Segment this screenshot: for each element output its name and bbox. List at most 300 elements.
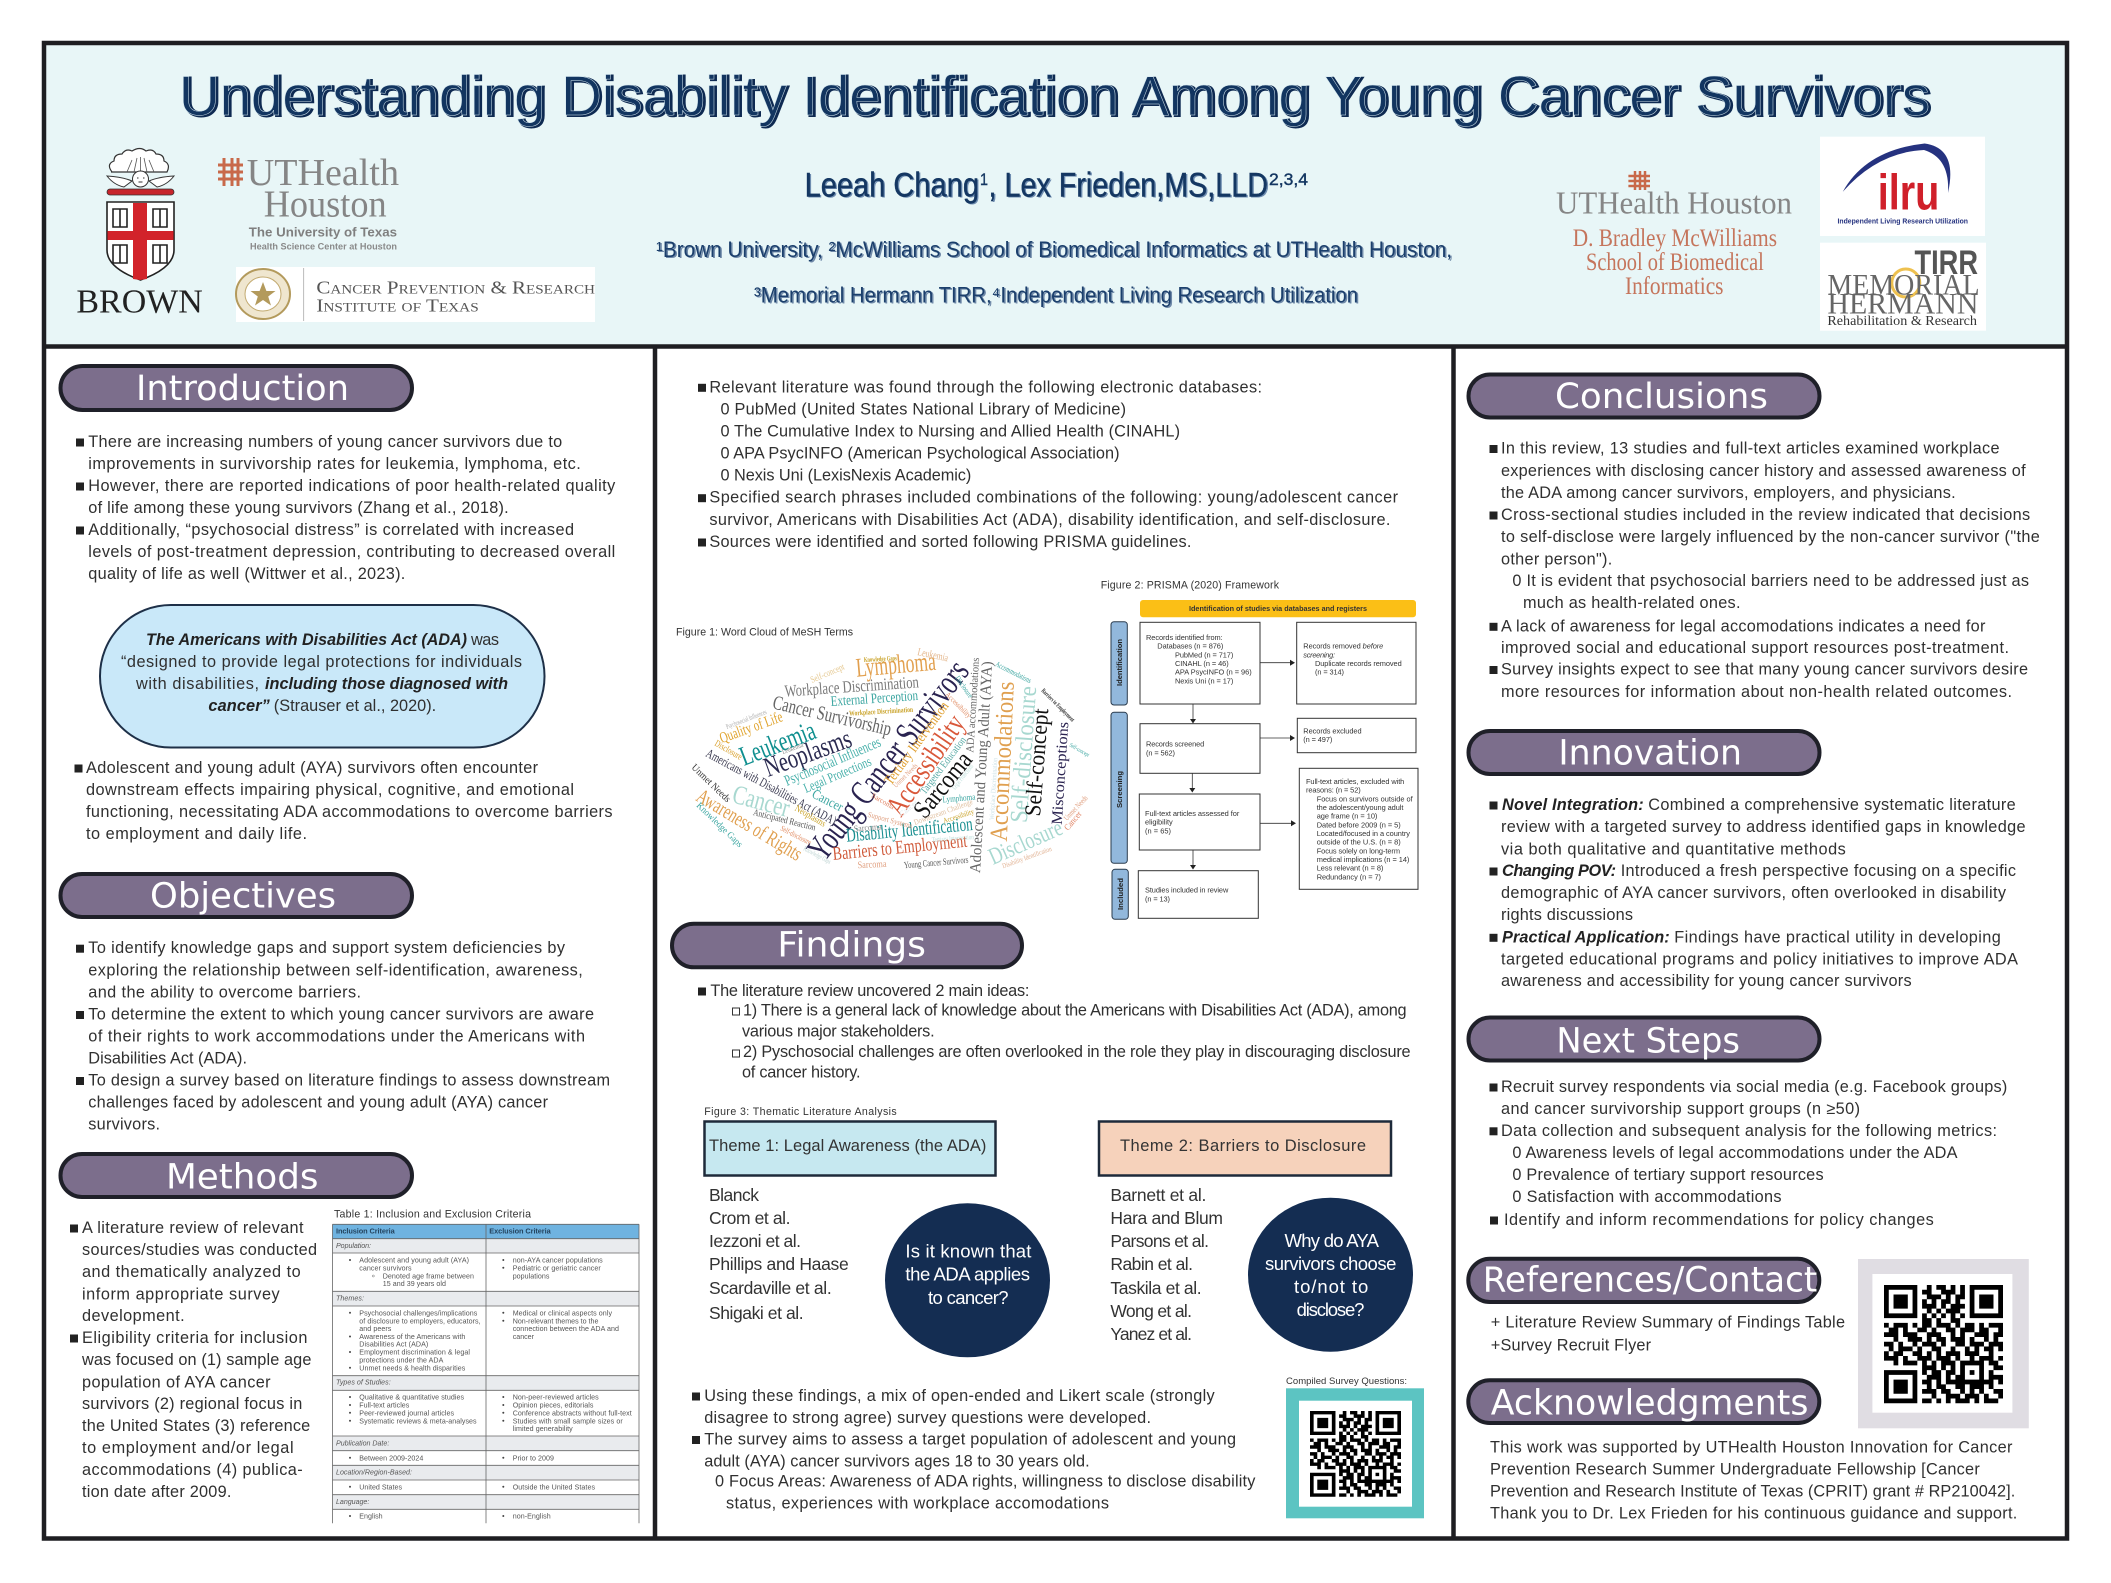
PRISMA boxes: (n = 562) xyxy=(1146,748,1175,757)
question circle 1: Is it known that xyxy=(905,1241,1031,1262)
question circle 2 xyxy=(1248,1198,1413,1352)
table 1: inclusion and exclusion criteria: Studies with small sample sizes or xyxy=(513,1417,623,1425)
figure 1: word cloud of MeSH terms xyxy=(676,627,1091,874)
figure 1: word cloud of MeSH terms: Disclosure xyxy=(953,674,975,700)
theme 1 study list: Phillips and Haase xyxy=(709,1254,849,1274)
PRISMA boxes: the adolescent/young adult xyxy=(1317,803,1403,812)
text: objectives bullets: challenges faced by adolescent and young adult (AYA) cancer xyxy=(88,1094,549,1112)
question circle 1: the ADA applies xyxy=(905,1264,1030,1285)
figure 1: word cloud of MeSH terms: Cancer Survivorship xyxy=(771,692,893,740)
PRISMA boxes: CINAHL (n = 46) xyxy=(1175,659,1229,668)
text: acknowledgments: This work was supported by UTHealth Houston Innovation for Cancer xyxy=(1490,1439,2013,1457)
heading: methods: Methods xyxy=(166,1158,318,1198)
figure 1: word cloud of MeSH terms: Misconceptions xyxy=(1049,721,1072,825)
QR code: references xyxy=(1858,1259,2029,1428)
panel: references and contact xyxy=(1468,1259,2029,1428)
text: introduction bullets: improvements in survivorship rates for leukemia, lymphoma, etc. xyxy=(88,455,581,473)
table 1: inclusion and exclusion criteria: Opinion pieces, editorials xyxy=(513,1402,594,1410)
panel: literature search text: Sources were identified and sorted following PRISMA guidelines. xyxy=(709,533,1191,551)
text: survey development: status, experiences with workplace accomodations xyxy=(726,1495,1109,1513)
PRISMA boxes: (n = 13) xyxy=(1145,894,1170,903)
heading: acknowledgments: Acknowledgments xyxy=(1491,1383,1808,1423)
figure 1: word cloud of MeSH terms: Knowledge Gaps xyxy=(694,801,744,850)
table 1: inclusion and exclusion criteria: Employment discrimination & legal xyxy=(359,1349,470,1357)
PRISMA boxes: Records removed before xyxy=(1303,642,1383,651)
figure 1: word cloud of MeSH terms: Workplace Discrimination xyxy=(784,672,920,701)
table 1: inclusion and exclusion criteria: Between 2009-2024 xyxy=(359,1454,423,1462)
text: introduction bullets: levels of post-treatment depression, contributing to decreased overall xyxy=(88,543,615,561)
text: methods bullets: inform appropriate survey xyxy=(82,1285,281,1303)
figure 1: word cloud of MeSH terms: Young Cancer Survivors xyxy=(799,652,977,868)
heading: objectives xyxy=(60,874,412,917)
text: objectives bullets: To design a survey based on literature findings to assess downstream xyxy=(88,1072,610,1090)
table 1: inclusion and exclusion criteria: connection between the ADA and xyxy=(513,1325,619,1333)
table 1: inclusion and exclusion criteria: Prior to 2009 xyxy=(513,1454,554,1462)
table 1: inclusion and exclusion criteria: of disclosure to employers, educators, xyxy=(359,1317,481,1325)
text: survey development xyxy=(692,1387,1256,1513)
logo: UTHealth Houston with University of Texas: Health Science Center at Houston xyxy=(250,241,397,252)
PRISMA arrows xyxy=(1189,660,1296,870)
figure 1: word cloud of MeSH terms: Psychosocial Influences xyxy=(725,708,768,731)
figure 1: word cloud of MeSH terms: Sarcoma xyxy=(907,745,978,824)
text: conclusions bullets: more resources for information about non-health related outcomes. xyxy=(1501,683,2012,701)
figure 1: word cloud of MeSH terms: Self-concept xyxy=(809,661,847,686)
figure 1: word cloud of MeSH terms: Lymphoma xyxy=(855,646,937,683)
heading: findings xyxy=(672,924,1022,967)
authors: 2,3,4 xyxy=(1269,170,1308,189)
theme 2 study list: Barnett et al. xyxy=(1110,1185,1206,1205)
theme 2 box: Theme 2: Barriers to Disclosure xyxy=(1120,1137,1366,1155)
affiliations: ³Memorial Hermann TIRR,⁴Independent Living Research Utilization xyxy=(754,283,1358,308)
theme 2 study list: Rabin et al. xyxy=(1110,1254,1193,1274)
figure 1: word cloud of MeSH terms: Psychosocial Influences xyxy=(782,734,883,790)
panel: literature search text: Specified search phrases included combinations of the following: young/adolescent cancer xyxy=(709,489,1399,507)
figure 1: word cloud of MeSH terms: Workplace Discrimination xyxy=(988,757,999,820)
theme 1 study list: Shigaki et al. xyxy=(709,1303,804,1323)
theme 2 study list: Taskila et al. xyxy=(1110,1278,1202,1298)
table 1: inclusion and exclusion criteria xyxy=(332,1209,639,1523)
logo: TIRR Memorial Hermann: HERMANN xyxy=(1827,287,1978,320)
panel: conclusions xyxy=(1468,374,2040,701)
figure 1: word cloud of MeSH terms: Disclosure xyxy=(985,815,1067,870)
figure 1: word cloud of MeSH terms: Sarcoma xyxy=(857,859,887,871)
theme 2 study list: Yanez et al. xyxy=(1110,1324,1192,1344)
PRISMA header banner: Identification of studies via databases and registers xyxy=(1189,604,1367,613)
table 1: inclusion and exclusion criteria: populations xyxy=(513,1272,550,1280)
panel: innovation xyxy=(1468,731,2026,990)
panel: methods xyxy=(60,1154,639,1523)
text: innovation bullets: Novel Integration: xyxy=(1502,796,1644,814)
text: AYA survivors bullet xyxy=(74,759,612,843)
figure 1: word cloud of MeSH terms: Disclosure xyxy=(712,739,743,763)
text: findings main ideas: 2) Pyschosocial challenges are often overlooked in the role they play in discouraging disclosure xyxy=(743,1043,1411,1061)
authors: , Lex Frieden,MS,LLD xyxy=(988,167,1268,205)
PRISMA boxes: Less relevant (n = 8) xyxy=(1317,864,1383,873)
figure 1: word cloud of MeSH terms: Unmet Needs xyxy=(689,762,733,805)
text: acknowledgments: Prevention Research Summer Undergraduate Fellowship [Cancer xyxy=(1490,1461,1980,1479)
PRISMA boxes: PubMed (n = 717) xyxy=(1175,650,1233,659)
question circle 2: Why do AYA xyxy=(1284,1230,1380,1251)
logo: UTHealth Houston with University of Texas: Houston xyxy=(264,184,387,226)
PRISMA boxes: Duplicate records removed xyxy=(1315,659,1402,668)
text: methods bullets: tion date after 2009. xyxy=(82,1483,231,1501)
table 1: inclusion and exclusion criteria: Location/Region-Based: xyxy=(336,1469,412,1477)
theme 2 study list xyxy=(1110,1185,1223,1344)
authors: Leeah Chang xyxy=(806,168,980,206)
PRISMA boxes: Records identified from: xyxy=(1146,633,1223,642)
text: innovation bullets: Practical Application: xyxy=(1502,928,1670,946)
panel: header band xyxy=(44,43,2067,346)
figure 1: word cloud of MeSH terms: Cancer xyxy=(898,798,920,819)
question circle 1: to cancer? xyxy=(928,1287,1009,1308)
text: survey development: adult (AYA) cancer survivors ages 18 to 30 years old. xyxy=(704,1452,1090,1470)
figure 1: word cloud of MeSH terms: Neoplasms xyxy=(760,723,856,784)
PRISMA boxes: outside of the U.S. (n = 8) xyxy=(1317,838,1401,847)
PRISMA boxes: reasons: (n = 52) xyxy=(1306,786,1361,795)
logo: TIRR Memorial Hermann: MEMORIAL xyxy=(1827,268,1980,301)
heading: introduction xyxy=(60,366,412,410)
PRISMA boxes: Nexis Uni (n = 17) xyxy=(1175,676,1233,685)
text: next steps bullets xyxy=(1490,1078,2007,1229)
text: conclusions bullets: other person"). xyxy=(1501,550,1612,568)
table 1: inclusion and exclusion criteria: Adolescent and young adult (AYA) xyxy=(359,1257,469,1265)
logo: UTHealth McWilliams School of Biomedical Informatics: School of Biomedical xyxy=(1586,249,1764,276)
text: innovation bullets: awareness and accessibility for young cancer survivors xyxy=(1501,972,1912,990)
callout: ADA definition: including those diagnosed with xyxy=(265,675,508,693)
text: innovation bullets: Introduced a fresh perspective focusing on a specific xyxy=(1621,862,2016,880)
text: AYA survivors bullet: to employment and daily life. xyxy=(86,825,307,843)
text: objectives bullets: survivors. xyxy=(88,1116,160,1134)
QR code: compiled survey questions: Compiled Survey Questions: xyxy=(1286,1376,1407,1387)
text: next steps bullets: Identify and inform recommendations for policy changes xyxy=(1504,1211,1934,1229)
table 1: inclusion and exclusion criteria: Exclusion Criteria xyxy=(489,1226,552,1235)
heading: objectives: Objectives xyxy=(150,877,336,917)
PRISMA boxes: (n = 314) xyxy=(1315,668,1344,677)
text: objectives bullets: Disabilities Act (ADA). xyxy=(88,1049,247,1067)
figure 1: word cloud of MeSH terms: Leukemia xyxy=(781,741,805,756)
theme 1 box xyxy=(704,1122,996,1176)
text: findings main ideas: 1) There is a general lack of knowledge about the Americans with Disabilities Act (ADA), among xyxy=(743,1001,1407,1019)
theme 1 box: Theme 1: Legal Awareness (the ADA) xyxy=(709,1137,986,1155)
PRISMA boxes: Dated before 2009 (n = 5) xyxy=(1317,820,1401,829)
theme 2 study list: Wong et al. xyxy=(1110,1301,1192,1321)
theme 2 study list: Parsons et al. xyxy=(1110,1231,1209,1251)
title: Understanding Disability Identification Among Young Cancer Survivors xyxy=(181,65,1932,128)
PRISMA phase labels: Screening xyxy=(1115,770,1124,808)
theme 1 study list: Crom et al. xyxy=(709,1208,790,1228)
theme 1 study list: Blanck xyxy=(709,1185,759,1205)
figure 1: word cloud of MeSH terms: Leukemia xyxy=(735,715,821,773)
table 1: inclusion and exclusion criteria: non-English xyxy=(513,1513,551,1521)
table 1: inclusion and exclusion criteria: Types of Studies: xyxy=(336,1379,391,1387)
text: next steps bullets: Recruit survey respondents via social media (e.g. Facebook groups) xyxy=(1501,1078,2007,1096)
text: survey development: The survey aims to assess a target population of adolescent and young xyxy=(704,1430,1236,1448)
table 1: inclusion and exclusion criteria: Systematic reviews & meta-analyses xyxy=(359,1417,477,1425)
figure 1: word cloud of MeSH terms: Self-disclosure xyxy=(779,824,813,847)
text: methods bullets: survivors (2) regional focus in xyxy=(82,1395,302,1413)
logo: Cancer Prevention and Research Institute of Texas: Cancer Prevention & Research xyxy=(316,277,595,297)
table 1: inclusion and exclusion criteria: Table 1: Inclusion and Exclusion Criteria xyxy=(334,1209,531,1221)
affiliations: ¹Brown University, ²McWilliams School of Biomedical Informatics at UTHealth Houston, xyxy=(656,237,1452,262)
logo: TIRR Memorial Hermann: TIRR xyxy=(1914,244,1978,282)
text: methods bullets: population of AYA cancer xyxy=(82,1373,271,1391)
PRISMA boxes: Focus on survivors outside of xyxy=(1317,794,1414,803)
callout: ADA definition: The Americans with Disabilities Act (ADA) xyxy=(146,631,467,649)
figure 1: word cloud of MeSH terms: Cancer xyxy=(729,779,793,823)
figure 2: PRISMA flow diagram xyxy=(1101,579,1418,919)
figure 1: word cloud of MeSH terms: Figure 1: Word Cloud of MeSH Terms xyxy=(676,627,853,639)
figure 1: word cloud of MeSH terms: Knowledge Gaps xyxy=(802,845,832,866)
text: innovation bullets: Combined a comprehensive systematic literature xyxy=(1648,796,2016,814)
table 1: inclusion and exclusion criteria: Awareness of the Americans with xyxy=(359,1333,465,1341)
table 1: inclusion and exclusion criteria: Medical or clinical aspects only xyxy=(513,1309,612,1317)
figure 1: word cloud of MeSH terms: Quality of Life xyxy=(717,708,785,747)
title: Understanding Disability Identification Among Young Cancer Survivors xyxy=(179,64,1930,127)
table 1: inclusion and exclusion criteria: cancer survivors xyxy=(359,1264,412,1272)
figure 1: word cloud of MeSH terms: External Perception xyxy=(830,688,919,710)
figure 1: word cloud of MeSH terms: Legal Protections xyxy=(950,763,975,791)
theme 1 study list: Iezzoni et al. xyxy=(709,1231,801,1251)
table 1: inclusion and exclusion criteria: Publication Date: xyxy=(336,1439,389,1447)
panel: findings xyxy=(672,924,1424,1518)
affiliations: ¹Brown University, ²McWilliams School of Biomedical Informatics at UTHealth Houston, xyxy=(658,238,1454,263)
figure 1: word cloud of MeSH terms: Tertiary Intervention xyxy=(881,698,953,788)
text: acknowledgments: Prevention and Research Institute of Texas (CPRIT) grant # RP210042]. xyxy=(1490,1483,2015,1501)
text: introduction bullets: of life among these young survivors (Zhang et al., 2018). xyxy=(88,499,509,517)
table 1: inclusion and exclusion criteria: 15 and 39 years old xyxy=(383,1280,446,1288)
logo: Cancer Prevention and Research Institute of Texas xyxy=(236,267,595,322)
table 1: inclusion and exclusion criteria: Non-relevant themes to the xyxy=(513,1317,598,1325)
logo: UTHealth McWilliams School of Biomedical Informatics: Informatics xyxy=(1625,273,1724,300)
callout: ADA definition: “designed to provide legal protections for individuals xyxy=(121,653,522,671)
figure 1: word cloud of MeSH terms: Awareness of Rights xyxy=(692,784,807,866)
PRISMA boxes: eligibility xyxy=(1145,818,1173,827)
PRISMA boxes: Records excluded xyxy=(1303,726,1362,735)
text: methods bullets: A literature review of relevant xyxy=(82,1219,304,1237)
figure 1: word cloud of MeSH terms: Sarcoma xyxy=(853,821,882,834)
panel: introduction xyxy=(60,366,616,843)
figure 3: thematic literature analysis xyxy=(704,1106,1413,1357)
theme 2 box xyxy=(1099,1122,1391,1176)
table 1: inclusion and exclusion criteria: Peer-reviewed journal articles xyxy=(359,1409,454,1417)
figure 1: word cloud of MeSH terms: Self-disclosure xyxy=(1006,685,1042,824)
figure 1: word cloud of MeSH terms: Unmet Needs xyxy=(1062,794,1090,822)
figure 1: word cloud of MeSH terms: Accommodations xyxy=(994,659,1033,685)
PRISMA boxes: Redundancy (n = 7) xyxy=(1317,872,1381,881)
text: references list xyxy=(1491,1313,1845,1355)
PRISMA boxes: Full-text articles, excluded with xyxy=(1306,777,1404,786)
heading: innovation: Innovation xyxy=(1558,734,1742,774)
panel: literature search text: 0 The Cumulative Index to Nursing and Allied Health (CINAHL) xyxy=(720,422,1180,440)
text: methods bullets: to employment and/or legal xyxy=(82,1439,294,1457)
text: conclusions bullets: experiences with disclosing cancer history and assessed awareness of xyxy=(1501,462,2026,480)
PRISMA boxes: screening: xyxy=(1303,650,1335,659)
PRISMA boxes: Studies included in review xyxy=(1145,886,1229,895)
heading: findings: Findings xyxy=(777,926,926,966)
table 1: inclusion and exclusion criteria: Psychosocial challenges/implications xyxy=(359,1309,478,1317)
figure 1: word cloud of MeSH terms: Leukemia xyxy=(916,646,949,664)
text: conclusions bullets xyxy=(1490,440,2040,701)
figure 1: word cloud of MeSH terms: Accessibility xyxy=(880,708,972,822)
text: findings main ideas: The literature review uncovered 2 main ideas: xyxy=(710,982,1029,1000)
callout: ADA definition: (Strauser et al., 2020). xyxy=(274,697,436,715)
figure 1: word cloud of MeSH terms: Unmet Needs xyxy=(892,762,919,789)
heading: methods xyxy=(60,1154,412,1198)
panel: literature search text xyxy=(698,378,1399,551)
table 1: inclusion and exclusion criteria: Non-peer-reviewed articles xyxy=(513,1394,599,1402)
affiliations xyxy=(656,237,1454,308)
figure 1: word cloud of MeSH terms: Legal Protections xyxy=(802,755,874,797)
figure 1: word cloud of MeSH terms: Sarcoma xyxy=(870,791,897,812)
text: conclusions bullets: A lack of awareness for legal accomodations indicates a need for xyxy=(1501,617,1986,635)
text: introduction bullets xyxy=(76,433,616,583)
panel: next steps xyxy=(1468,1018,2007,1229)
text: innovation bullets xyxy=(1490,796,2026,990)
text: AYA survivors bullet: Adolescent and young adult (AYA) survivors often encounter xyxy=(86,759,539,777)
heading: conclusions xyxy=(1468,374,1820,418)
text: findings main ideas: of cancer history. xyxy=(742,1064,860,1082)
panel: literature search text: 0 PubMed (United States National Library of Medicine) xyxy=(720,400,1126,418)
text: conclusions bullets: to self-disclose were largely influenced by the non-cancer survivor ("the xyxy=(1501,528,2040,546)
figure 1: word cloud of MeSH terms: Americans with Disabilities Act (ADA) xyxy=(704,745,839,828)
text: methods bullets: accommodations (4) publica- xyxy=(82,1461,303,1479)
table 1: inclusion and exclusion criteria: Unmet needs & health disparities xyxy=(359,1364,466,1372)
panel: acknowledgments xyxy=(1468,1380,2017,1523)
figure 1: word cloud of MeSH terms: Young Cancer Survivors xyxy=(904,856,969,871)
figure 1: word cloud of MeSH terms: Support Systems xyxy=(867,810,914,831)
panel: literature search text: survivor, Americans with Disabilities Act (ADA), disability identification, and self-disclosure. xyxy=(709,511,1390,529)
text: survey development: Using these findings, a mix of open-ended and Likert scale (strongly xyxy=(704,1387,1216,1405)
text: innovation bullets: Findings have practical utility in developing xyxy=(1674,928,2001,946)
text: innovation bullets: rights discussions xyxy=(1501,906,1633,924)
question circle 2: survivors choose xyxy=(1265,1253,1396,1274)
text: next steps bullets: and cancer survivorship support groups (n ≥50) xyxy=(1501,1100,1860,1118)
text: references list: + Literature Review Summary of Findings Table xyxy=(1491,1313,1845,1331)
logo: UTHealth Houston with University of Texas: The University of Texas xyxy=(249,225,397,240)
heading: next steps: Next Steps xyxy=(1556,1021,1740,1061)
PRISMA boxes: Focus solely on long-term xyxy=(1317,846,1400,855)
table 1: inclusion and exclusion criteria: Outside the United States xyxy=(513,1483,595,1491)
figure 1: word cloud of MeSH terms: Neoplasms xyxy=(793,804,827,830)
figure 1: word cloud of MeSH terms: ADA accommodations xyxy=(964,657,982,753)
figure 1: word cloud of MeSH terms: Tertiary Intervention xyxy=(932,833,974,844)
logo: TIRR Memorial Hermann xyxy=(1820,243,1986,331)
table 1: inclusion and exclusion criteria: Disabilities Act (ADA) xyxy=(359,1341,428,1349)
affiliations: ³Memorial Hermann TIRR,⁴Independent Living Research Utilization xyxy=(756,284,1360,308)
callout: ADA definition xyxy=(100,605,544,748)
authors: 1 xyxy=(980,170,988,189)
text: AYA survivors bullet: downstream effects impairing physical, cognitive, and emotional xyxy=(86,781,574,799)
text: introduction bullets: However, there are reported indications of poor health-related quality xyxy=(88,477,616,495)
logo: UTHealth McWilliams School of Biomedical Informatics: D. Bradley McWilliams xyxy=(1573,225,1777,252)
text: conclusions bullets: Survey insights expect to see that many young cancer survivors desire xyxy=(1501,660,2028,678)
theme 1 study list xyxy=(709,1185,849,1323)
logo: Brown University xyxy=(76,148,203,321)
text: innovation bullets: targeted educational programs and policy initiatives to improve ADA xyxy=(1501,950,2018,968)
callout: ADA definition: cancer” xyxy=(208,697,271,715)
table 1: inclusion and exclusion criteria: Full-text articles xyxy=(359,1402,410,1410)
text: innovation bullets: demographic of AYA cancer survivors, often overlooked in disability xyxy=(1501,884,2007,902)
text: objectives bullets xyxy=(76,939,610,1134)
table 1: inclusion and exclusion criteria: and peers xyxy=(359,1325,392,1333)
figure 1: word cloud of MeSH terms: Lymphoma xyxy=(942,792,976,804)
theme 1 study list: Scardaville et al. xyxy=(709,1278,832,1298)
heading: conclusions: Conclusions xyxy=(1555,377,1768,417)
panel: literature search text: 0 APA PsycINFO (American Psychological Association) xyxy=(720,444,1120,462)
text: findings main ideas: various major stakeholders. xyxy=(742,1023,935,1041)
table 1: inclusion and exclusion criteria: Population: xyxy=(336,1242,371,1250)
text: objectives bullets: To determine the extent to which young cancer survivors are aware xyxy=(88,1006,594,1024)
callout: ADA definition: was xyxy=(470,631,499,649)
text: next steps bullets: 0 Satisfaction with accommodations xyxy=(1512,1188,1782,1206)
text: objectives bullets: and the ability to overcome barriers. xyxy=(88,984,361,1002)
table 1: inclusion and exclusion criteria: Language: xyxy=(336,1498,369,1506)
text: findings main ideas xyxy=(698,982,1411,1082)
question circle 2: to/not to xyxy=(1294,1276,1368,1297)
logo: TIRR Memorial Hermann: Rehabilitation & Research xyxy=(1827,314,1977,329)
figure 1: word cloud of MeSH terms: Anticipated Reaction xyxy=(752,808,817,833)
panel: literature search text: 0 Nexis Uni (LexisNexis Academic) xyxy=(720,467,971,485)
table 1: inclusion and exclusion criteria: non-AYA cancer populations xyxy=(513,1257,603,1265)
text: conclusions bullets: In this review, 13 studies and full-text articles examined workplace xyxy=(1501,440,2000,458)
logo: UTHealth Houston with University of Texas: UTHealth xyxy=(247,152,399,194)
figure 1: word cloud of MeSH terms: Self-concept xyxy=(1020,707,1053,817)
table 1: inclusion and exclusion criteria: United States xyxy=(359,1483,402,1491)
text: introduction bullets: quality of life as well (Wittwer et al., 2023). xyxy=(88,565,405,583)
logo: UTHealth McWilliams School of Biomedical Informatics: UTHealth Houston xyxy=(1556,184,1792,220)
figure 1: word cloud of MeSH terms: Targeted Education xyxy=(919,735,969,797)
figure 1: word cloud of MeSH terms: Workplace Discrimination xyxy=(849,705,914,718)
table 1: inclusion and exclusion criteria: Conference abstracts without full-text xyxy=(513,1409,632,1417)
PRISMA phase labels: Included xyxy=(1116,877,1125,910)
logo: Brown University: BROWN xyxy=(76,284,203,321)
PRISMA boxes: (n = 65) xyxy=(1145,826,1171,835)
panel: objectives xyxy=(60,874,610,1134)
text: references list: +Survey Recruit Flyer xyxy=(1491,1337,1652,1355)
text: acknowledgments: Thank you to Dr. Lex Frieden for his continuous guidance and support. xyxy=(1490,1505,2017,1523)
table 1: inclusion and exclusion criteria: protections under the ADA xyxy=(359,1356,444,1364)
figure 1: word cloud of MeSH terms: Adolescent and Young Adult (AYA) xyxy=(967,661,996,874)
text: AYA survivors bullet: functioning, necessitating ADA accommodations to overcome barriers xyxy=(86,803,612,821)
heading: introduction: Introduction xyxy=(136,369,349,409)
logo: UTHealth Houston with University of Texas xyxy=(218,152,399,252)
table 1: inclusion and exclusion criteria: Qualitative & quantitative studies xyxy=(359,1394,464,1402)
text: next steps bullets: Data collection and subsequent analysis for the following metrics: xyxy=(1501,1122,1997,1140)
table 1: inclusion and exclusion criteria: Inclusion Criteria xyxy=(336,1226,396,1235)
logo: Cancer Prevention and Research Institute of Texas: Institute of Texas xyxy=(316,296,479,316)
heading: innovation xyxy=(1468,731,1820,774)
text: acknowledgments xyxy=(1490,1439,2017,1523)
text: introduction bullets: There are increasing numbers of young cancer survivors due to xyxy=(88,433,562,451)
table 1: inclusion and exclusion criteria: cancer xyxy=(513,1333,535,1341)
figure 1: word cloud of MeSH terms: Downstream Challenge xyxy=(913,797,974,827)
question circle 1 xyxy=(885,1203,1050,1357)
logo: ILRU: ilru xyxy=(1878,164,1939,220)
question circle 2: disclose? xyxy=(1297,1299,1364,1320)
figure 1: word cloud of MeSH terms: Disability Identification xyxy=(1001,845,1053,870)
text: objectives bullets: exploring the relationship between self-identification, awareness, xyxy=(88,961,583,979)
PRISMA boxes: Located/focused in a country xyxy=(1317,829,1410,838)
text: methods bullets: Eligibility criteria for inclusion xyxy=(82,1329,307,1347)
logo: UTHealth McWilliams School of Biomedical Informatics xyxy=(1556,171,1792,300)
figure 1: word cloud of MeSH terms: Cancer xyxy=(810,786,846,815)
text: conclusions bullets: Cross-sectional studies included in the review indicated that decisions xyxy=(1501,506,2030,524)
PRISMA boxes: Full-text articles assessed for xyxy=(1145,809,1240,818)
text: methods bullets: development. xyxy=(82,1307,185,1325)
figure 1: word cloud of MeSH terms: Accessibility xyxy=(942,807,975,825)
PRISMA boxes: (n = 497) xyxy=(1303,735,1332,744)
figure 1: word cloud of MeSH terms: Accommodations xyxy=(986,681,1020,842)
